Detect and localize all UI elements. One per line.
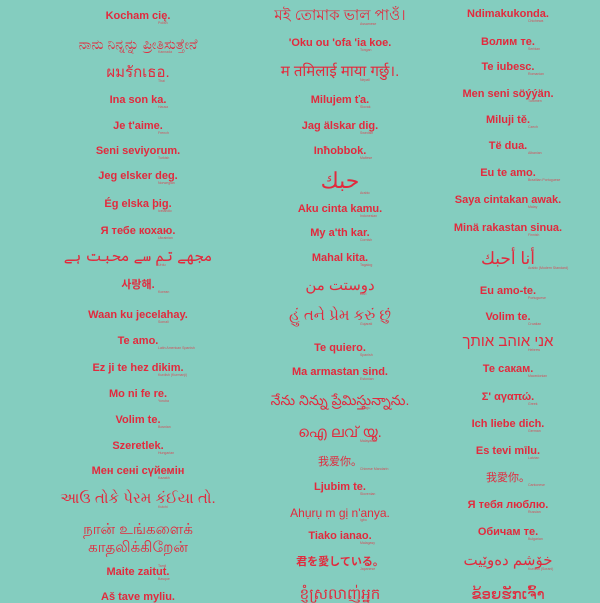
column: right: Portuguese bbox=[528, 296, 546, 300]
phrase: Spanish: Te quiero. bbox=[314, 342, 366, 354]
phrase: Korean: 사랑해. bbox=[121, 279, 155, 291]
column: middle: Japanese bbox=[360, 567, 375, 571]
column: left: Korean bbox=[158, 290, 169, 294]
column: left: Hausa bbox=[158, 105, 168, 109]
column: left: Norwegian bbox=[158, 181, 175, 185]
column: right: Chichewa bbox=[528, 19, 543, 23]
column: middle: Assamese bbox=[360, 22, 376, 26]
phrase: Chinese Mandarin: 我爱你。 bbox=[318, 456, 362, 468]
phrase: Norwegian: Jeg elsker deg. bbox=[98, 170, 178, 182]
phrase: Malay bbox=[378, 195, 600, 206]
column: right: Latvian bbox=[528, 456, 539, 460]
phrase: Greek bbox=[378, 392, 600, 403]
phrase: German bbox=[378, 419, 600, 430]
phrase: Hungarian bbox=[112, 440, 174, 455]
phrase: Croatian: Volim te. bbox=[485, 311, 531, 323]
column: right: Bulgarian bbox=[528, 537, 543, 541]
phrase: Basque: Maite zaitut. bbox=[107, 566, 169, 578]
phrase: Malagasy bbox=[210, 531, 470, 542]
phrase: Cantonese bbox=[378, 473, 600, 484]
phrase: Gujarati: હું તને પ્રેમ કરું છું bbox=[289, 307, 391, 324]
column: middle: Cornish bbox=[360, 238, 372, 242]
phrase: Hebrew bbox=[378, 334, 600, 349]
phrase: Bulgarian: Обичам те. bbox=[478, 526, 538, 538]
phrase: Somali: Waan ku jecelahay. bbox=[88, 309, 188, 321]
phrase: Slovenian bbox=[210, 482, 470, 493]
column: middle: Malayalam bbox=[360, 439, 377, 443]
phrase: Tamil: காதலிக்கிறேன் bbox=[88, 539, 188, 556]
column: left: Kannada bbox=[158, 50, 172, 54]
column: right: Arabic (Modern Standard) bbox=[528, 266, 568, 270]
phrase: Kurdish: Ez ji te hez dikim. bbox=[92, 362, 184, 374]
column: right: Albanian bbox=[528, 151, 542, 155]
phrase: Khmer: ខ្ញុំស្រលាញ់អ្នក bbox=[300, 586, 380, 603]
phrase: Finnish: Minä rakastan sinua. bbox=[454, 222, 562, 234]
phrase: Russian bbox=[378, 500, 600, 511]
phrase: Albanian: Të dua. bbox=[489, 140, 527, 152]
phrase: Hebrew: אני אוהב אותך bbox=[462, 333, 553, 350]
phrase: Indonesian: Aku cinta kamu. bbox=[298, 203, 382, 215]
column: middle: Slovak bbox=[360, 105, 371, 109]
column: middle: Chinese Mandarin bbox=[360, 467, 388, 471]
phrase: Turkmen: Men seni söýýän. bbox=[462, 88, 554, 100]
column: right: Macedonian bbox=[528, 374, 547, 378]
column: middle: Gujarati bbox=[360, 322, 372, 326]
phrase: Greek: Σ' αγαπώ. bbox=[482, 391, 534, 403]
column: left: Urdu bbox=[158, 263, 166, 267]
column: left: Somali bbox=[158, 320, 169, 324]
phrase: Brazilian Portuguese bbox=[378, 168, 600, 179]
column: left: Latin American Spanish bbox=[158, 346, 195, 350]
phrase: Romanian bbox=[378, 62, 600, 73]
phrase: Arabic: حبك bbox=[321, 168, 359, 193]
column: left bbox=[60, 10, 216, 603]
column: middle: Telugu bbox=[360, 406, 370, 410]
phrase: Chichewa: Ndimakukonda. bbox=[467, 8, 549, 20]
phrase: Portuguese: Eu amo-te. bbox=[480, 285, 536, 297]
column: left: Icelandic bbox=[158, 209, 172, 213]
column: middle bbox=[271, 6, 409, 603]
column: middle: Tongan bbox=[360, 48, 371, 52]
column: middle: Estonian bbox=[360, 377, 374, 381]
column: left: French bbox=[158, 131, 169, 135]
column: middle: Slovenian bbox=[360, 492, 375, 496]
phrase: Ukrainian: Я тебе кохаю. bbox=[101, 225, 175, 237]
column: middle: Indonesian bbox=[360, 214, 377, 218]
phrase: Latvian bbox=[378, 446, 600, 457]
phrase: Serbian bbox=[378, 37, 600, 48]
phrase: Hungarian: Szeretlek. bbox=[112, 440, 164, 452]
phrase: Finnish bbox=[378, 223, 600, 234]
phrase: Nepali: म तमिलाई माया गर्छु।. bbox=[281, 63, 399, 80]
column: left: Basque bbox=[158, 577, 170, 581]
column: left: Kazakh bbox=[158, 476, 170, 480]
phrase: Chichewa bbox=[378, 9, 600, 20]
phrase: Chinese Mandarin bbox=[318, 456, 388, 471]
phrase: Urdu: مجھے تم سے محبت ہے bbox=[64, 248, 212, 265]
phrase: French: Je t'aime. bbox=[113, 120, 163, 132]
phrase: Korean bbox=[121, 278, 170, 294]
column: left: Hungarian bbox=[158, 451, 174, 455]
phrase: Tamil bbox=[83, 521, 193, 568]
phrase: Macedonian bbox=[378, 364, 600, 375]
phrase: Czech bbox=[378, 115, 600, 126]
column: right: Croatian bbox=[528, 322, 541, 326]
column: left: Bosnian bbox=[158, 425, 171, 429]
phrase: Latin American Spanish bbox=[118, 335, 195, 350]
column: middle: Dari bbox=[360, 292, 366, 296]
column: left: Kurdish (Kurmanji) bbox=[158, 373, 187, 377]
phrase: Kurdish Sorani: خۆشم دەوێیت bbox=[464, 552, 552, 569]
phrase: Igbo: Ahụrụ m gị n'anya. bbox=[290, 506, 390, 520]
phrase: Lithuanian: Aš tave myliu. bbox=[101, 591, 175, 603]
phrase: Turkish: Seni seviyorum. bbox=[96, 145, 180, 157]
column: left: Yoruba bbox=[158, 399, 169, 403]
phrase: Bosnian: Volim te. bbox=[115, 414, 161, 426]
column: right: Finnish bbox=[528, 233, 539, 237]
column: middle: Tagalog bbox=[360, 263, 372, 267]
column: right: Turkmen bbox=[528, 99, 542, 103]
phrase: Brazilian Portuguese: Eu te amo. bbox=[480, 167, 536, 179]
phrase: Croatian bbox=[378, 312, 600, 323]
column: left: Thai bbox=[158, 79, 165, 83]
phrase: Assamese: মই তোমাক ভাল পাওঁ। bbox=[274, 7, 406, 24]
column: left: Kutchi bbox=[158, 505, 168, 509]
column: middle: Malagasy bbox=[360, 541, 375, 545]
phrase: Japanese: 君を愛している。 bbox=[296, 556, 384, 568]
column: right: Brazilian Portuguese bbox=[528, 178, 560, 182]
phrase: Estonian: Ma armastan sind. bbox=[292, 366, 388, 378]
column: left: Tamil bbox=[158, 564, 166, 568]
column: left: Polish bbox=[158, 21, 168, 25]
phrase: Tongan: 'Oku ou 'ofa 'ia koe. bbox=[289, 37, 391, 49]
phrase: Slovak: Milujem ťa. bbox=[311, 94, 369, 106]
phrase: Russian: Я тебя люблю. bbox=[468, 499, 548, 511]
phrase: Igbo bbox=[210, 507, 470, 519]
phrase: Portuguese bbox=[378, 286, 600, 297]
column: middle: Swedish bbox=[360, 131, 373, 135]
phrase: Tamil: நான் உங்களைக் bbox=[83, 521, 193, 538]
phrase: Slovenian: Ljubim te. bbox=[314, 481, 366, 493]
phrase: Bulgarian bbox=[378, 527, 600, 538]
phrase: Arabic MSA bbox=[378, 250, 600, 267]
column: right: Kurdish (Sorani) bbox=[528, 567, 553, 571]
phrase: Hausa: Ina son ka. bbox=[110, 94, 166, 106]
column: left: Turkish bbox=[158, 156, 169, 160]
column: right: Cantonese bbox=[528, 483, 545, 487]
phrase: Kurdish Sorani bbox=[378, 553, 600, 568]
phrase: Cornish: My a'th kar. bbox=[310, 227, 370, 239]
phrase: German: Ich liebe dich. bbox=[472, 418, 544, 430]
column: left: Ukrainian bbox=[158, 236, 173, 240]
phrase: Malagasy: Tiako ianao. bbox=[308, 530, 372, 542]
column: right: Malay bbox=[528, 205, 537, 209]
column: middle: Arabic bbox=[360, 191, 370, 195]
column: right bbox=[400, 0, 600, 600]
phrase: Czech: Miluji tě. bbox=[486, 114, 530, 126]
phrase: Kazakh: Мен сені сүйемін bbox=[92, 465, 184, 477]
phrase: Malay: Saya cintakan awak. bbox=[455, 194, 561, 206]
phrase: Latvian: Es tevi mīlu. bbox=[476, 445, 540, 457]
phrase: Albanian bbox=[378, 141, 600, 152]
phrase: Cantonese: 我愛你。 bbox=[486, 472, 530, 484]
phrase: Polish: Kocham cię. bbox=[106, 10, 170, 22]
column: middle: Nepali bbox=[360, 78, 370, 82]
phrase: Dari: دوستت من bbox=[305, 277, 375, 294]
column: right: German bbox=[528, 429, 541, 433]
phrase: Icelandic: Ég elska þig. bbox=[104, 198, 172, 210]
column: right: Greek bbox=[528, 402, 538, 406]
phrase: Maltese: Inħobbok. bbox=[314, 145, 366, 157]
phrase: Macedonian: Те сакам. bbox=[483, 363, 533, 375]
phrase: Telugu: నేను నిన్ను ప్రేమిస్తున్నాను. bbox=[271, 392, 409, 408]
phrase: Latin American Spanish: Te amo. bbox=[118, 335, 158, 347]
column: middle: Igbo bbox=[360, 518, 367, 522]
phrase: Romanian: Te iubesc. bbox=[482, 61, 534, 73]
phrase: Tagalog: Mahal kita. bbox=[312, 252, 368, 264]
column: middle: Spanish bbox=[360, 353, 373, 357]
column: right: Czech bbox=[528, 125, 538, 129]
phrase: Swedish: Jag älskar dig. bbox=[302, 120, 378, 132]
phrase: Kutchi: આઉ તોકે પેરમ કંઈયા તો. bbox=[60, 490, 216, 507]
phrase: Bosnian bbox=[115, 414, 171, 429]
phrase: Malayalam: ഐ ലവ് യൂ. bbox=[298, 424, 382, 441]
phrase: Japanese bbox=[210, 557, 470, 568]
phrase: Kannada: ನಾನು ನಿನ್ನನ್ನು ಪ್ರೀತಿಸುತ್ತೇನೆ bbox=[79, 36, 197, 52]
phrase: Lao: ຂ້ອຍຮັກເຈົ້າ bbox=[471, 586, 545, 603]
phrase: Serbian: Волим те. bbox=[481, 36, 535, 48]
phrase: Turkmen bbox=[378, 89, 600, 100]
column: right: Romanian bbox=[528, 72, 544, 76]
phrase: Thai: ผมรักเธอ. bbox=[106, 64, 170, 81]
phrase: Arabic MSA: أنا أحبك bbox=[481, 249, 535, 268]
column: right: Hebrew bbox=[528, 348, 540, 352]
column: middle: Maltese bbox=[360, 156, 372, 160]
column: right: Serbian bbox=[528, 47, 540, 51]
column: right: Russian bbox=[528, 510, 541, 514]
phrase: Yoruba: Mo ni fe re. bbox=[109, 388, 167, 400]
